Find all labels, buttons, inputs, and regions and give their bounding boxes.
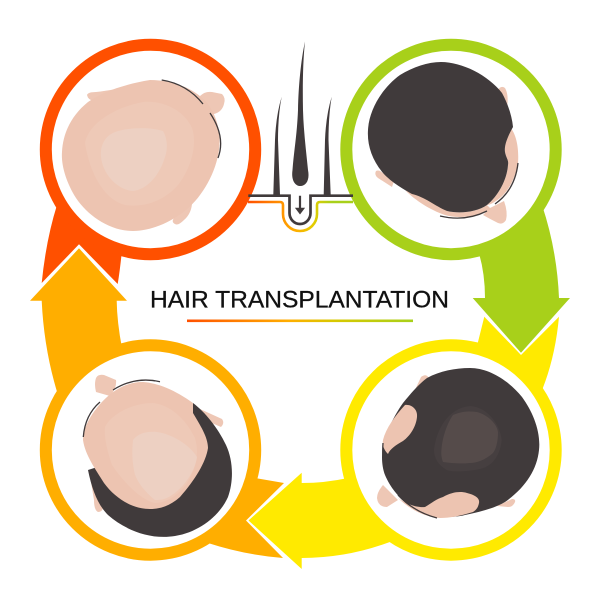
right hair xyxy=(324,97,332,195)
scalp highlight inner xyxy=(132,432,197,500)
hair band xyxy=(88,403,232,537)
ears xyxy=(375,87,508,224)
central hair xyxy=(292,42,309,186)
left hair xyxy=(273,97,282,195)
hair xyxy=(368,62,513,212)
scalp highlight inner xyxy=(101,128,167,191)
hairline arc xyxy=(440,163,518,218)
scalp xyxy=(62,80,220,231)
coloured follicle outline xyxy=(248,202,353,231)
thinning spot inner xyxy=(441,411,498,463)
down arrow xyxy=(296,196,304,214)
green ring xyxy=(346,45,556,254)
red ring xyxy=(46,45,255,254)
skin patch top xyxy=(383,405,417,454)
scalp xyxy=(83,382,208,509)
yellow ring xyxy=(346,345,556,555)
orange ring xyxy=(46,345,255,555)
panel: partial hair head, orange ring xyxy=(46,345,255,555)
arrow tail: yellow xyxy=(477,317,559,395)
hairline arc xyxy=(383,443,437,518)
ears xyxy=(87,89,225,224)
scalp highlight mid xyxy=(85,102,194,206)
thinning spot outer xyxy=(434,406,502,471)
icon: hair follicle xyxy=(248,42,353,231)
arrow: green pointing down xyxy=(473,205,570,353)
hair xyxy=(382,368,539,517)
title: HAIR TRANSPLANTATION xyxy=(150,286,449,314)
panel: thinning hair head, yellow ring xyxy=(346,345,556,555)
hairline arc xyxy=(162,80,221,158)
skin patch bottom xyxy=(406,191,491,217)
skin patch right xyxy=(487,127,518,205)
skin line and follicle xyxy=(248,196,353,224)
arrow: orange pointing up xyxy=(30,248,127,395)
ears xyxy=(377,375,515,507)
title underline xyxy=(187,320,413,322)
skin patch bottom xyxy=(397,492,479,518)
arrow: yellow pointing left xyxy=(248,473,395,569)
arrow tail: red xyxy=(42,205,122,284)
scalp highlight mid xyxy=(105,403,197,503)
ears xyxy=(89,375,223,512)
arrow tail: orange xyxy=(208,478,284,558)
hairline arc xyxy=(83,380,160,437)
panel: bald head, red ring xyxy=(46,45,255,254)
panel: full hair head, green ring xyxy=(346,45,556,254)
